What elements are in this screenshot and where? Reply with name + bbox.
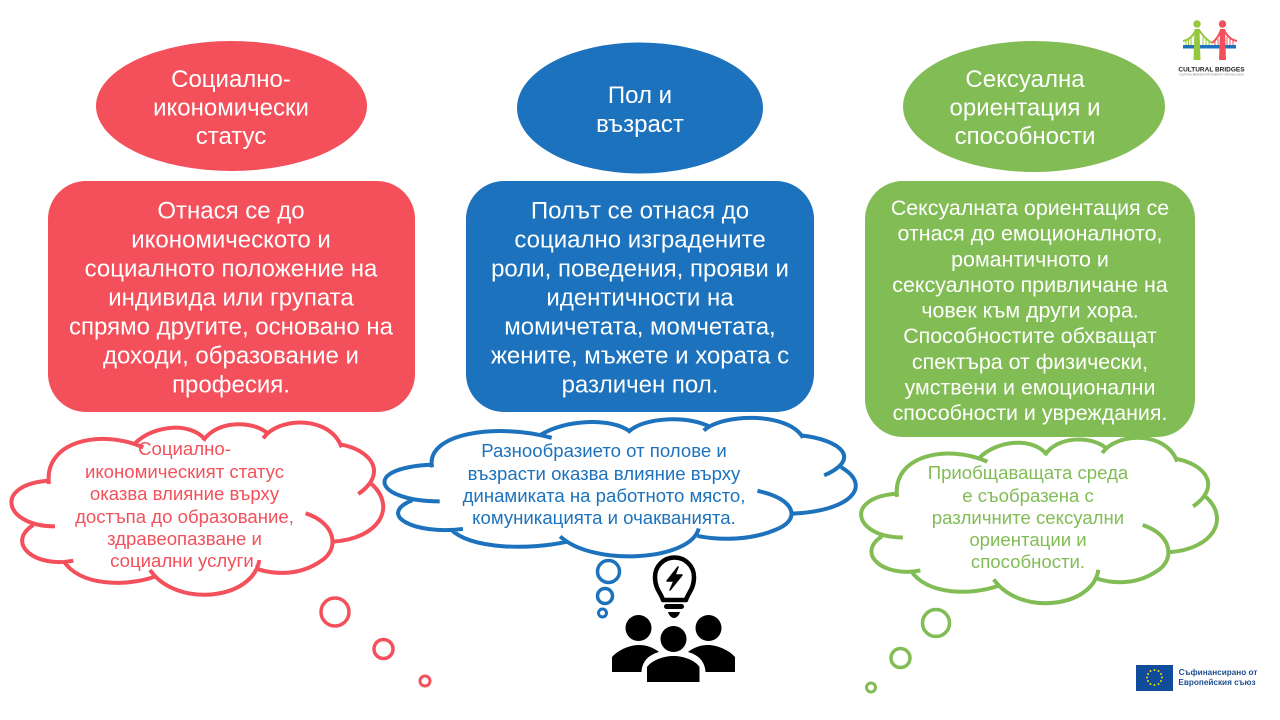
panel: gender and age definition: Полът се отнася до	[531, 198, 749, 224]
panel: sexual orientation and abilities definition	[865, 181, 1195, 437]
panel: sexual orientation and abilities definition: човек към други хора.	[921, 298, 1139, 322]
panel: socio-economic status definition: индивида или групата	[108, 284, 354, 312]
callout: green thought cloud	[861, 438, 1217, 603]
callout: green thought cloud: способности.	[971, 551, 1085, 572]
callout: red thought cloud: достъпа до образование,	[75, 506, 294, 527]
panel: sexual orientation and abilities definition: отнася до емоционалното,	[898, 222, 1162, 246]
panel: sexual orientation and abilities heading: Сексуална	[965, 66, 1085, 93]
panel: sexual orientation and abilities heading: ориентация и	[950, 94, 1100, 122]
icon: green thought bubbles	[866, 610, 950, 692]
logo: Cultural Bridges: CULTURAL BRIDGES	[1178, 66, 1245, 74]
panel: gender and age definition: роли, поведения, прояви и	[491, 256, 789, 282]
logo: Cultural Bridges: CULTURAL BRIDGES FOR DIVERSITY AND INCLUSION	[1179, 74, 1244, 76]
callout: blue thought cloud: Разнообразието от полове и	[481, 440, 727, 461]
logo: EU flag and co-funded statement	[1136, 665, 1257, 691]
icon: light bulb with lightning	[655, 558, 694, 618]
panel: sexual orientation and abilities definition: умствени и емоционални	[905, 376, 1155, 400]
panel: gender and age definition: идентичности на	[546, 284, 734, 312]
callout: green thought cloud: различните сексуални	[932, 507, 1124, 528]
callout: red thought cloud: оказва влияние върху	[90, 483, 280, 504]
panel: socio-economic status heading	[96, 41, 367, 171]
callout: red thought cloud: икономическият статус	[85, 461, 284, 482]
panel: sexual orientation and abilities definition: спектъра от физически,	[912, 350, 1148, 374]
callout: red thought cloud: социални услуги.	[110, 550, 259, 571]
panel: socio-economic status heading: икономически	[153, 94, 309, 122]
panel: socio-economic status definition	[48, 181, 415, 412]
icon: red thought bubbles	[321, 598, 430, 686]
panel: socio-economic status definition: доходи, образование и	[103, 342, 359, 370]
callout: red thought cloud	[11, 422, 383, 595]
panel: socio-economic status definition: спрямо другите, основано на	[69, 314, 394, 340]
callout: green thought cloud: е съобразена с	[962, 485, 1094, 506]
panel: socio-economic status heading: статус	[196, 123, 266, 150]
logo: EU flag and co-funded statement: Европейския съюз	[1178, 678, 1256, 687]
callout: green thought cloud: Приобщаващата среда	[928, 462, 1129, 483]
panel: gender and age definition: различен пол.	[562, 372, 718, 398]
panel: socio-economic status definition: Отнася се до	[157, 198, 305, 224]
callout: blue thought cloud: възрасти оказва влияние върху	[468, 463, 741, 484]
logo: Cultural Bridges	[1178, 20, 1245, 76]
panel: sexual orientation and abilities definition: сексуалното привличане на	[892, 273, 1168, 297]
panel: gender and age heading: възраст	[596, 111, 684, 138]
panel: gender and age definition: социално изградените	[514, 226, 766, 254]
panel: gender and age heading	[517, 42, 763, 174]
callout: blue thought cloud	[384, 418, 856, 556]
panel: gender and age definition: жените, мъжете и хората с	[491, 342, 789, 370]
callout: blue thought cloud: динамиката на работното място,	[463, 485, 745, 506]
panel: socio-economic status heading: Социално-	[171, 66, 291, 93]
panel: gender and age definition: момичетата, момчетата,	[504, 314, 776, 340]
panel: socio-economic status definition: професия.	[172, 372, 290, 398]
icon: group of three people	[612, 615, 735, 682]
panel: sexual orientation and abilities definition: способности и увреждания.	[893, 401, 1167, 425]
callout: blue thought cloud: комуникацията и очакванията.	[472, 507, 736, 528]
icon: blue thought bubbles	[598, 560, 620, 617]
logo: EU flag and co-funded statement: Съфинансирано от	[1179, 668, 1257, 677]
panel: sexual orientation and abilities definition: Способностите обхващат	[903, 324, 1157, 348]
panel: sexual orientation and abilities definition: Сексуалната ориентация се	[891, 196, 1169, 220]
callout: red thought cloud: здравеопазване и	[107, 528, 262, 549]
panel: sexual orientation and abilities heading: способности	[955, 123, 1095, 150]
panel: gender and age definition	[466, 181, 814, 412]
panel: gender and age heading: Пол и	[608, 82, 672, 109]
panel: socio-economic status definition: икономическото и	[131, 226, 331, 254]
panel: sexual orientation and abilities heading	[903, 41, 1165, 172]
callout: red thought cloud: Социално-	[138, 438, 231, 459]
callout: green thought cloud: ориентации и	[969, 529, 1087, 550]
panel: sexual orientation and abilities definition: романтичното и	[951, 247, 1109, 271]
panel: socio-economic status definition: социалното положение на	[85, 256, 378, 282]
